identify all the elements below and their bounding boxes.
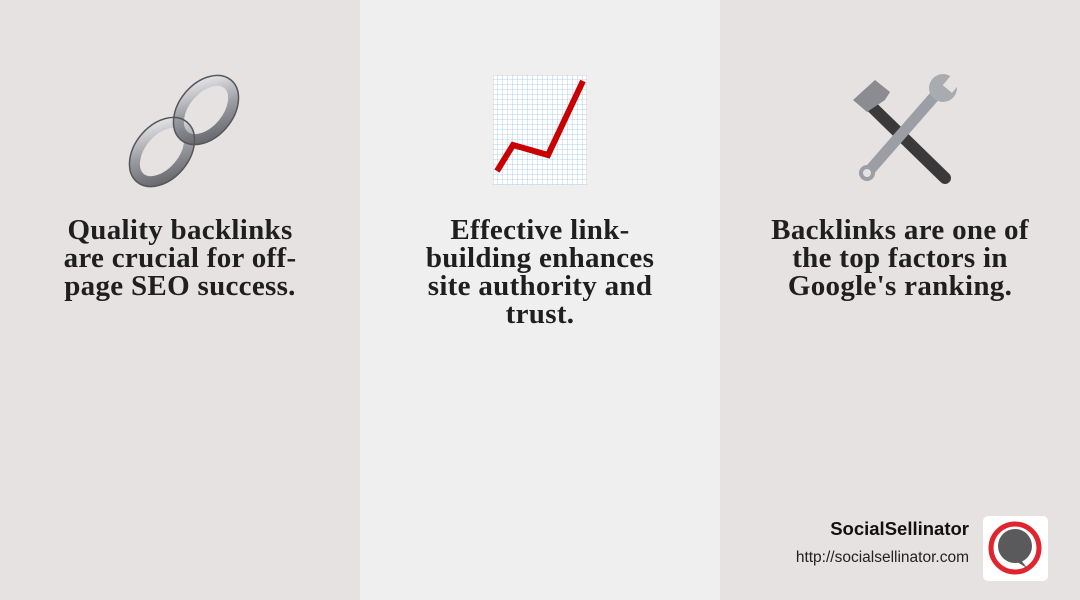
text: middle: building enhances <box>426 242 654 274</box>
text: right: the top factors in <box>792 242 1008 274</box>
text: left <box>64 214 296 302</box>
icon: chart increasing <box>493 75 587 185</box>
panel: right <box>720 0 1080 600</box>
text: left: page SEO success. <box>64 270 296 302</box>
text: middle: trust. <box>506 298 574 330</box>
panel: middle <box>360 0 720 600</box>
icon: hammer and wrench <box>853 74 957 184</box>
panel: left <box>0 0 360 600</box>
text: left: Quality backlinks <box>67 214 293 246</box>
text: middle: site authority and <box>428 270 652 302</box>
icon: chain links <box>128 74 240 188</box>
text: right: Backlinks are one of <box>771 214 1029 246</box>
brand url: http://socialsellinator.com <box>796 549 969 566</box>
text: left: are crucial for off- <box>64 242 296 274</box>
brand name: SocialSellinator <box>830 518 969 539</box>
text: middle <box>426 214 654 330</box>
logo <box>983 516 1048 581</box>
text: middle: Effective link- <box>450 214 630 246</box>
text: right: Google's ranking. <box>788 270 1012 302</box>
text: right <box>771 214 1029 302</box>
